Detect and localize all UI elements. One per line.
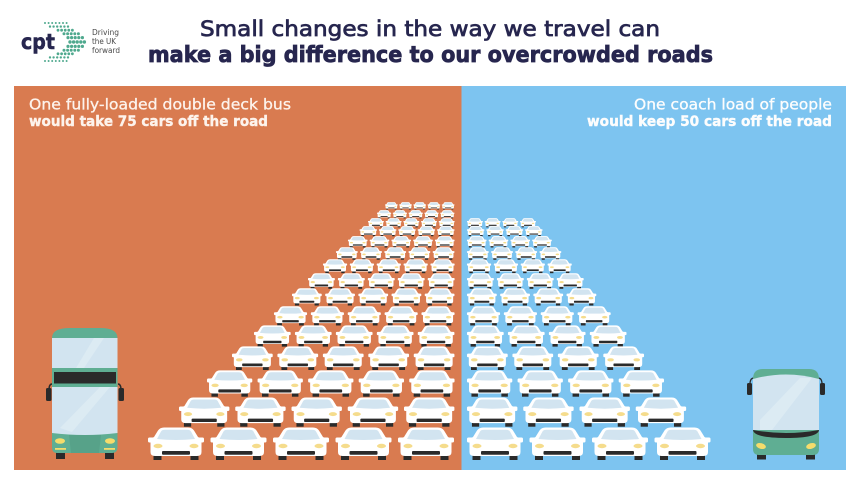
- panel heading: coach: [587, 96, 832, 130]
- panel: coach: [462, 86, 846, 470]
- title: make a big difference to our overcrowded roads: [148, 42, 713, 68]
- panel: double deck bus: [14, 86, 462, 470]
- logo tagline: Driving: [92, 28, 119, 37]
- panel heading: coach: would keep 50 cars off the road: [587, 114, 832, 130]
- icon: coach: [747, 369, 825, 460]
- panel heading: coach: One coach load of people: [634, 96, 832, 114]
- title: [148, 17, 713, 68]
- traffic: coach cars: [467, 218, 710, 460]
- panel heading: bus: One fully-loaded double deck bus: [29, 96, 291, 114]
- panel heading: bus: would take 75 cars off the road: [29, 114, 268, 130]
- icon: double deck bus: [46, 328, 124, 459]
- title: Small changes in the way we travel can: [200, 17, 660, 42]
- logo tagline: the UK: [92, 37, 117, 46]
- logo dots arrow: [45, 23, 86, 61]
- logo: cpt: [21, 23, 120, 61]
- logo wordmark: cpt: [21, 30, 55, 54]
- logo tagline: [92, 28, 120, 55]
- panel heading: bus: [29, 96, 291, 130]
- traffic: 75 cars: [148, 202, 455, 460]
- logo tagline: forward: [92, 46, 120, 55]
